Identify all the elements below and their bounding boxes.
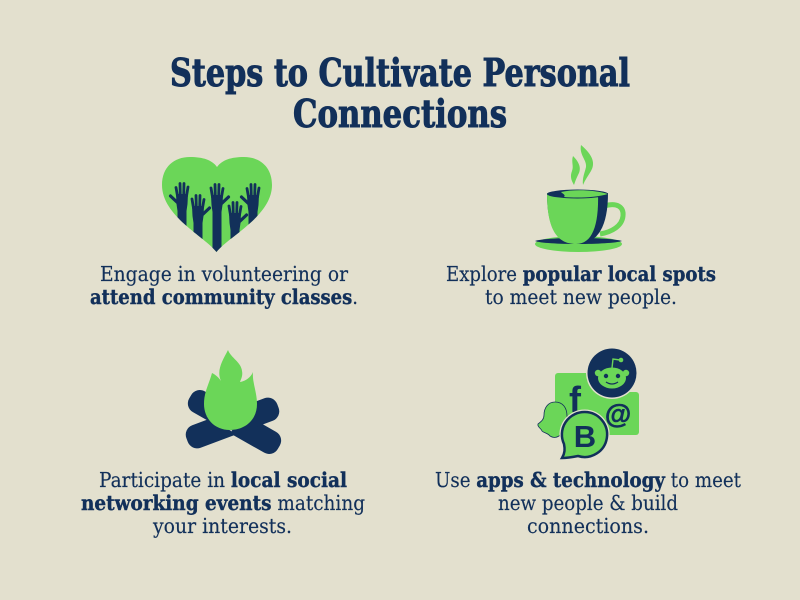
at sign: @ [605, 399, 631, 429]
cup body [547, 193, 608, 244]
icon: heart with raised hands [162, 157, 272, 252]
icon: campfire [183, 350, 285, 458]
handle [600, 205, 623, 234]
text: volunteering: Engage in volunteering or [100, 262, 348, 286]
text: social events: Participate in local social [99, 468, 347, 492]
saucer [535, 236, 622, 252]
text: volunteering: attend community classes. [90, 285, 358, 309]
text: social events: networking events matching [81, 491, 365, 515]
text: local spots [446, 262, 716, 309]
green panels [555, 373, 610, 423]
text: apps and technology [435, 468, 742, 538]
facebook f: f [569, 379, 582, 420]
business chat bubble: B [574, 419, 596, 454]
steam [571, 145, 593, 185]
text: apps and technology: Use apps & technology to meet [435, 468, 742, 492]
text: local spots: Explore popular local spots [446, 262, 716, 286]
reddit badge [586, 347, 638, 399]
logs [184, 386, 285, 458]
icon: coffee cup [535, 145, 623, 252]
rim [547, 190, 608, 198]
title: Connections [293, 91, 507, 136]
title [170, 50, 630, 136]
icon: social apps [538, 347, 639, 458]
text: apps and technology: new people & build [498, 491, 678, 515]
text: local spots: to meet new people. [485, 285, 677, 309]
snapchat ghost [538, 402, 572, 438]
text: social events [81, 468, 365, 538]
flame [204, 350, 257, 430]
text: volunteering [90, 262, 358, 309]
text: apps and technology: connections. [527, 514, 649, 538]
text: social events: your interests. [152, 514, 292, 538]
title: Steps to Cultivate Personal [170, 50, 630, 95]
